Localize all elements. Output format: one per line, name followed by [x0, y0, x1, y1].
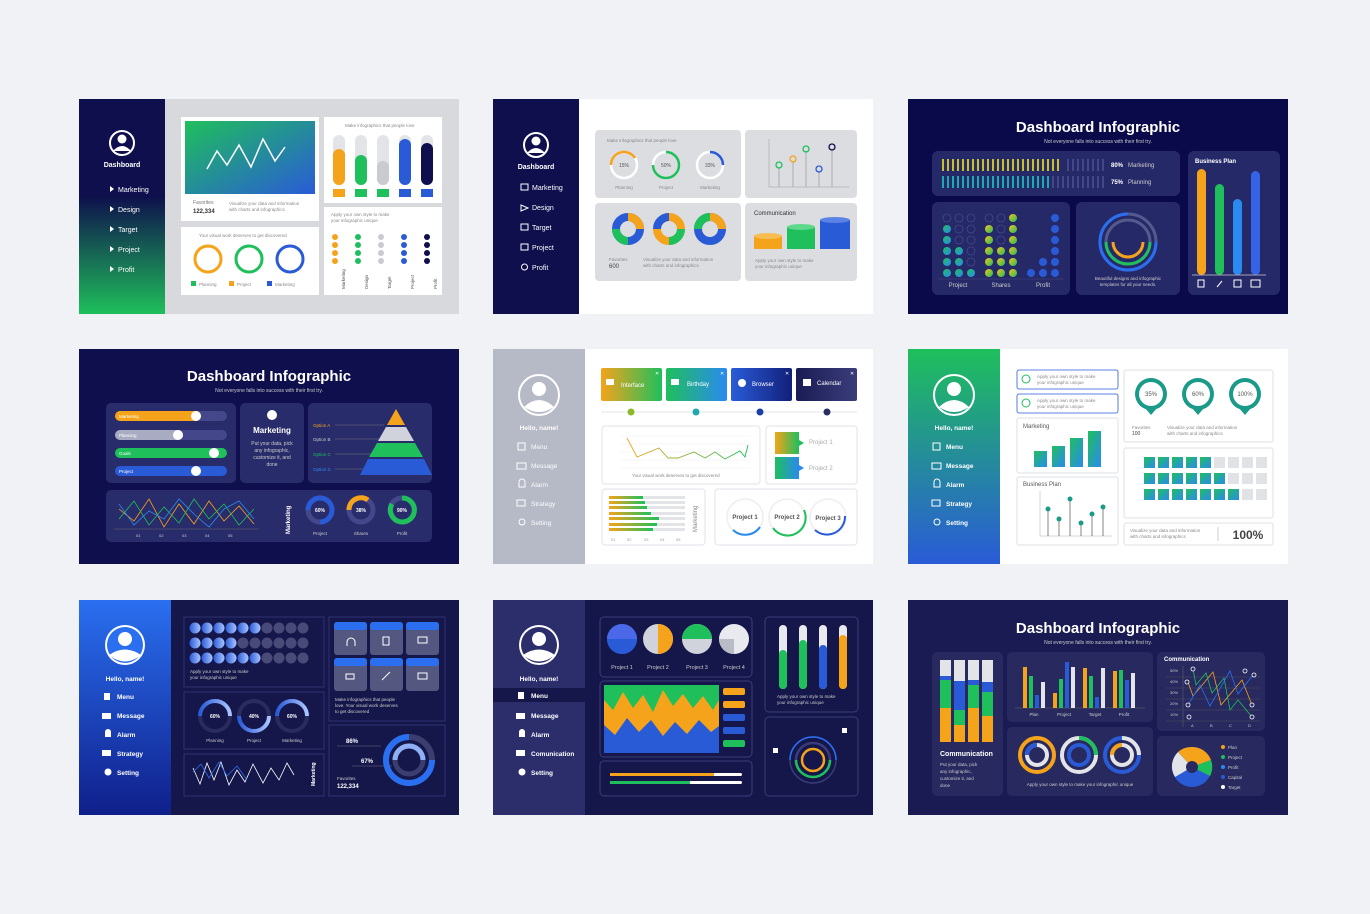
- panel: stacked bars: [932, 652, 1003, 796]
- sidebar: Strategy: [117, 751, 143, 758]
- panel: sliders: Project: [119, 469, 134, 474]
- card: horizontal bars: 04: [660, 537, 665, 542]
- panel: stacked bars: Communication: [940, 751, 993, 758]
- card: communication cylinders: [745, 203, 857, 281]
- panel: concentric rings: [1076, 202, 1180, 295]
- panel: gauges: Profit: [397, 531, 408, 536]
- sidebar: Alarm: [531, 732, 550, 739]
- card: progress rings: 50%: [661, 163, 672, 169]
- sidebar: Dashboard: [518, 164, 554, 171]
- card: donuts: Planning: [199, 282, 217, 287]
- sidebar: Comunication: [531, 751, 574, 758]
- sidebar: Message: [531, 713, 559, 720]
- sidebar: [493, 99, 579, 314]
- sidebar: Project: [532, 245, 554, 252]
- panel: progress stripes: 75%: [1111, 180, 1124, 186]
- panel: pie with legend: Project: [1228, 755, 1243, 760]
- panel: gauges: 90%: [397, 508, 408, 514]
- panel: pie projects: Project 4: [723, 665, 745, 671]
- tabs: ✕: [850, 371, 854, 377]
- panel: radial rings: [329, 725, 445, 796]
- title: [187, 368, 351, 394]
- card: pie charts: 600: [609, 264, 620, 270]
- panel: pyramid: Option B: [313, 437, 331, 442]
- panel: concentric rings: Beautiful designs and infographic: [1095, 276, 1162, 281]
- sidebar: Menu: [531, 693, 548, 700]
- panel: pie with legend: [1157, 736, 1265, 796]
- panel: concentric rings: templates for all your needs.: [1100, 282, 1156, 287]
- sidebar: [493, 600, 585, 815]
- card: progress rings: Planning: [615, 185, 633, 190]
- card: project rings: Project 2: [774, 515, 800, 521]
- panel: radial gauge: [765, 717, 858, 796]
- slide 9: dark dashboard communication: [908, 600, 1288, 815]
- card: pie charts: [595, 203, 741, 281]
- card: progress rings: [595, 130, 741, 198]
- slide 7: blue sidebar dark dashboard: [79, 600, 459, 815]
- panel: pyramid: Option C: [313, 452, 332, 457]
- panel: communication line chart: 10%: [1170, 712, 1178, 717]
- panel: grouped bars: Project: [1057, 712, 1072, 717]
- card: projects: Project 2: [809, 466, 833, 472]
- tabs: Interface: [621, 383, 645, 389]
- panel: vertical bars: your infographic unique: [777, 700, 824, 705]
- card: pie charts: Favorites: [609, 257, 628, 262]
- card: 100%: with charts and infographics: [1130, 534, 1187, 539]
- sidebar: [493, 349, 585, 564]
- card: pill bars: Make infographics that people love: [345, 123, 415, 128]
- card: progress rings: 15%: [619, 163, 630, 169]
- panel: sliders: Marketing: [119, 414, 139, 419]
- card: horizontal bars: 05: [676, 537, 681, 542]
- panel: stacked bars: any infographic,: [940, 769, 972, 774]
- panel: communication line chart: C: [1229, 723, 1232, 728]
- panel: stacked bars: Put your data, pick: [940, 762, 978, 767]
- panel: grouped bars: Profit: [1119, 712, 1130, 717]
- panel: dot matrix: Project: [949, 283, 968, 289]
- panel: gauges: Project: [313, 531, 328, 536]
- panel: line chart: 02: [159, 533, 164, 538]
- card: projects: [766, 426, 857, 484]
- sidebar: Menu: [117, 694, 134, 701]
- panel: communication line chart: 40%: [1170, 679, 1178, 684]
- panel: grouped bars: Plan: [1029, 712, 1039, 717]
- panel: radial rings: 122,334: [337, 784, 359, 790]
- panel: communication line chart: Communication: [1164, 657, 1210, 663]
- panel: rings: 60%: [210, 714, 221, 720]
- sidebar: Hello, name!: [520, 676, 558, 683]
- title: Dashboard Infographic: [187, 368, 351, 385]
- panel: pie with legend: Target: [1228, 785, 1241, 790]
- buttons: [1017, 370, 1118, 413]
- panel: pie with legend: Capital: [1228, 775, 1242, 780]
- card: pin gauges: 60%: [1192, 392, 1205, 398]
- slide 5: light dashboard with tabs: [493, 349, 873, 564]
- panel: business plan bars: Business Plan: [1195, 159, 1236, 165]
- panel: zigzag chart: Marketing: [311, 762, 317, 786]
- title: Not everyone falls into success with their first try.: [215, 388, 323, 394]
- card: pin gauges: Visualize your data and information: [1167, 425, 1238, 430]
- slide 6: green-blue sidebar light dashboard: [908, 349, 1288, 564]
- card: dot grid: your infographic unique: [331, 218, 378, 223]
- tabs: ✕: [785, 371, 789, 377]
- panel: communication line chart: A: [1191, 723, 1194, 728]
- card: pin gauges: 35%: [1145, 392, 1158, 398]
- panel: icon tiles: to get discovered: [335, 709, 370, 714]
- card: line chart: 122,334: [193, 209, 215, 215]
- sidebar: Profit: [532, 265, 548, 272]
- panel: rings: Project: [247, 738, 262, 743]
- panel: icon tiles: love. Your visual work deserves: [335, 703, 399, 708]
- panel: stacked bars: done: [940, 783, 951, 788]
- sidebar: Setting: [946, 520, 968, 527]
- sidebar: Alarm: [531, 482, 548, 489]
- card: 100%: [1124, 523, 1273, 545]
- sidebar: Setting: [117, 770, 139, 777]
- panel: marketing text: [240, 403, 304, 483]
- panel: grouped bars: Target: [1089, 712, 1102, 717]
- card: project rings: Project 1: [732, 515, 758, 521]
- card: business plan lollipops: Business Plan: [1023, 482, 1061, 488]
- panel: line chart: 01: [136, 533, 141, 538]
- panel: progress stripes: Planning: [1128, 180, 1151, 186]
- card: pin gauges: 100%: [1237, 392, 1253, 398]
- panel: progress stripes: 80%: [1111, 163, 1124, 169]
- sidebar: Design: [532, 205, 554, 212]
- card: line chart: Favorites: [193, 200, 214, 206]
- card: progress rings: 33%: [705, 163, 716, 169]
- sidebar: Message: [531, 463, 558, 470]
- panel: progress stripes: [932, 151, 1180, 196]
- title: Dashboard Infographic: [1016, 620, 1180, 637]
- panel: bubble grid: Apply your own style to make: [190, 669, 249, 674]
- title: [1016, 620, 1180, 646]
- panel: dot matrix: Profit: [1036, 283, 1050, 289]
- panel: pie projects: Project 2: [647, 665, 669, 671]
- panel: gauges: Shares: [354, 531, 369, 536]
- panel: pie projects: Project 3: [686, 665, 708, 671]
- panel: vertical bars: [765, 617, 858, 712]
- card: donuts: Marketing: [275, 282, 295, 287]
- panel: gauges: 38%: [356, 508, 367, 514]
- sidebar: Dashboard: [104, 162, 140, 169]
- panel: line chart: 05: [228, 533, 233, 538]
- slide 1: light dashboard with green sidebar: [79, 99, 459, 314]
- panel: marketing text: Marketing: [253, 426, 291, 435]
- panel: line chart: 04: [205, 533, 210, 538]
- card: dot grid: Profit: [433, 278, 438, 289]
- tabs: Birthday: [687, 382, 709, 388]
- sidebar: Hello, name!: [935, 425, 973, 432]
- tabs: ✕: [720, 371, 724, 377]
- card: pin gauges: 100: [1132, 431, 1141, 437]
- slide 8: navy dashboard with area chart: [493, 600, 873, 815]
- card: pie charts: with charts and infographics: [643, 263, 700, 268]
- panel: communication line chart: [1157, 652, 1265, 731]
- tabs: ✕: [655, 371, 659, 377]
- card: dot grid: Design: [364, 274, 369, 289]
- panel: sliders: [106, 403, 236, 483]
- sidebar: Strategy: [531, 501, 556, 508]
- card: project rings: Project 3: [815, 516, 841, 522]
- card: donuts: [181, 227, 319, 295]
- panel: pyramid: [308, 403, 432, 483]
- card: marketing cylinders: Marketing: [1023, 424, 1049, 430]
- title: Not everyone falls into success with their first try.: [1044, 640, 1152, 646]
- card: 100%: 100%: [1233, 528, 1264, 542]
- panel: dot matrix: [932, 202, 1070, 295]
- panel: rings: 60%: [287, 714, 298, 720]
- card: horizontal bars: 03: [644, 537, 649, 542]
- card: pin gauges: Favorites: [1132, 425, 1151, 430]
- sidebar: Project: [118, 247, 140, 254]
- panel: radial rings: 67%: [361, 759, 374, 765]
- sidebar: Menu: [946, 444, 963, 451]
- card: horizontal bars: 01: [611, 537, 616, 542]
- card: pin gauges: with charts and infographics: [1167, 431, 1224, 436]
- card: horizontal bars: 02: [627, 537, 632, 542]
- sidebar: Message: [946, 463, 974, 470]
- sidebar: Hello, name!: [520, 425, 558, 432]
- panel: communication line chart: 30%: [1170, 690, 1178, 695]
- buttons: Apply your own style to make: [1037, 374, 1096, 379]
- card: projects: Project 1: [809, 440, 833, 446]
- card: communication cylinders: Apply your own style to make: [755, 258, 814, 263]
- card: 100%: Visualize your data and information: [1130, 528, 1201, 533]
- sidebar: Target: [118, 227, 138, 234]
- panel: sliders: [600, 761, 752, 796]
- sidebar: Alarm: [946, 482, 965, 489]
- card: progress rings: Make infographics that people love: [607, 138, 677, 143]
- sidebar: [79, 99, 165, 314]
- panel: business plan bars: [1188, 151, 1280, 295]
- panel: rings: Planning: [206, 738, 224, 743]
- panel: vertical bars: Apply your own style to make: [777, 694, 836, 699]
- panel: sliders: Goals: [119, 451, 132, 456]
- sidebar: [79, 600, 171, 815]
- card: progress rings: Marketing: [700, 185, 720, 190]
- card: donuts: Project: [237, 282, 252, 287]
- card: progress rings: Project: [659, 185, 674, 190]
- panel: bubble grid: your infographic unique: [190, 675, 237, 680]
- card: horizontal bars: [602, 489, 705, 545]
- card: line chart: [602, 426, 760, 484]
- panel: pyramid: Option A: [313, 423, 330, 428]
- panel: marketing text: done: [266, 462, 278, 468]
- sidebar: Marketing: [118, 187, 149, 194]
- card: tile matrix: [1124, 448, 1273, 518]
- panel: marketing text: any infographic,: [254, 448, 290, 454]
- panel: sliders: Planning: [119, 433, 137, 438]
- card: dot grid: Target: [387, 276, 392, 289]
- panel: icon tiles: [329, 617, 445, 721]
- card: business plan lollipops: [1017, 477, 1118, 545]
- card: donuts: Your visual work deserves to get discovered: [199, 233, 287, 238]
- card: line chart: Your visual work deserves to get discovered: [632, 473, 720, 478]
- sidebar: Marketing: [532, 185, 563, 192]
- card: dot grid: [324, 207, 442, 295]
- panel: radial rings: 86%: [346, 739, 359, 745]
- card: communication cylinders: your infographic unique: [755, 264, 802, 269]
- panel: icon tiles: Make infographics that people: [335, 697, 396, 702]
- card: marketing cylinders: [1017, 418, 1118, 473]
- panel: rings: 40%: [249, 714, 260, 720]
- sidebar: Setting: [531, 770, 553, 777]
- card: horizontal bars: Marketing: [693, 506, 699, 532]
- panel: gauges: 60%: [315, 508, 326, 514]
- panel: communication line chart: B: [1210, 723, 1213, 728]
- panel: communication line chart: 20%: [1170, 701, 1178, 706]
- panel: pie projects: Project 1: [611, 665, 633, 671]
- slide 3: dark dashboard: [908, 99, 1288, 314]
- card: line chart: [181, 117, 319, 221]
- title: Not everyone falls into success with their first try.: [1044, 139, 1152, 145]
- card: lollipop chart: [745, 130, 857, 198]
- panel: pie with legend: Profit: [1228, 765, 1239, 770]
- panel: grouped bars: [1007, 652, 1153, 722]
- sidebar: Setting: [531, 520, 552, 527]
- panel: area chart: [600, 681, 752, 757]
- panel: zigzag chart: [184, 754, 324, 796]
- panel: rings: [184, 692, 324, 749]
- sidebar: Menu: [531, 444, 548, 451]
- title: [1016, 119, 1180, 145]
- panel: ring trio: Apply your own style to make your infographic unique: [1027, 782, 1134, 787]
- panel: ring trio: [1007, 727, 1153, 796]
- card: communication cylinders: Communication: [754, 211, 796, 217]
- card: line chart: Visualize your data and information: [229, 201, 300, 206]
- panel: pyramid: Option D: [313, 467, 332, 472]
- slide 4: dark dashboard with pyramid: [79, 349, 459, 564]
- slide 2: navy sidebar, gray cards: [493, 99, 873, 314]
- card: dot grid: Marketing: [341, 269, 346, 289]
- sidebar: Strategy: [946, 501, 972, 508]
- card: dot grid: Apply your own style to make: [331, 212, 390, 217]
- card: pin gauges: [1124, 370, 1273, 442]
- panel: dot matrix: Shares: [991, 283, 1011, 289]
- sidebar: [908, 349, 1000, 564]
- sidebar: Message: [117, 713, 145, 720]
- panel: gauges: [274, 490, 432, 542]
- panel: stacked bars: customize it, and: [940, 776, 974, 781]
- panel: bubble grid: [184, 617, 324, 687]
- sidebar: Design: [118, 207, 140, 214]
- panel: marketing text: customize it, and: [253, 455, 291, 461]
- tabs: [601, 368, 857, 416]
- card: pill bars: [324, 117, 442, 203]
- panel: marketing text: Put your data, pick: [251, 441, 293, 447]
- panel: line chart: 03: [182, 533, 187, 538]
- title: Dashboard Infographic: [1016, 119, 1180, 136]
- panel: rings: Marketing: [282, 738, 302, 743]
- card: pie charts: Visualize your data and information: [643, 257, 714, 262]
- sidebar: Profit: [118, 267, 134, 274]
- panel: radial rings: Favorites: [337, 776, 356, 781]
- panel: gauges: Marketing: [286, 505, 292, 534]
- buttons: your infographic unique: [1037, 380, 1084, 385]
- panel: progress stripes: Marketing: [1128, 163, 1154, 169]
- tabs: Browser: [752, 382, 774, 388]
- panel: communication line chart: D: [1248, 723, 1251, 728]
- panel: communication line chart: 50%: [1170, 668, 1178, 673]
- sidebar: Hello, name!: [106, 676, 144, 683]
- panel: pie with legend: Plan: [1228, 745, 1238, 750]
- card: dot grid: Project: [410, 274, 415, 289]
- panel: line chart: [106, 490, 346, 542]
- sidebar: Target: [532, 225, 552, 232]
- buttons: Apply your own style to make: [1037, 398, 1096, 403]
- sidebar: Alarm: [117, 732, 136, 739]
- tabs: Calendar: [817, 381, 841, 387]
- card: line chart: with charts and infographics: [229, 207, 286, 212]
- buttons: your infographic unique: [1037, 404, 1084, 409]
- panel: pie projects: [600, 617, 752, 677]
- card: project rings: [715, 489, 857, 545]
